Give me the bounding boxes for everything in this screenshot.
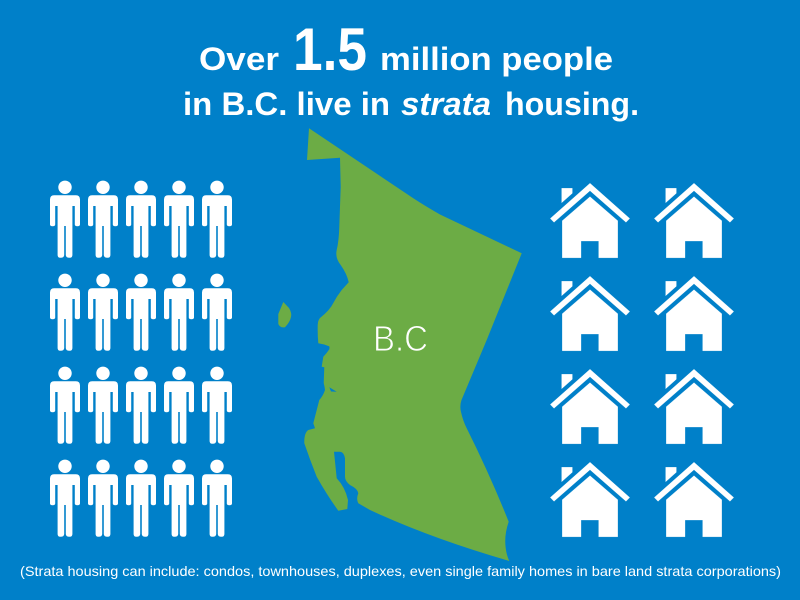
- footnote: (Strata housing can include: condos, townhouses, duplexes, even single family homes in bare land strata corporations): [20, 563, 781, 579]
- title: million people: [380, 41, 613, 77]
- map label: B.C: [373, 318, 428, 359]
- people icon grid: [50, 181, 232, 537]
- map: Haida Gwaii: [278, 302, 291, 327]
- title: 1.5: [293, 16, 367, 83]
- map: mainland: [304, 128, 522, 561]
- title: housing.: [505, 86, 639, 122]
- title: [183, 16, 639, 122]
- title: in B.C. live in: [183, 86, 390, 122]
- title: strata: [401, 86, 491, 122]
- title: Over: [199, 41, 279, 77]
- map: British Columbia: [278, 128, 522, 561]
- house icon grid: [550, 183, 734, 537]
